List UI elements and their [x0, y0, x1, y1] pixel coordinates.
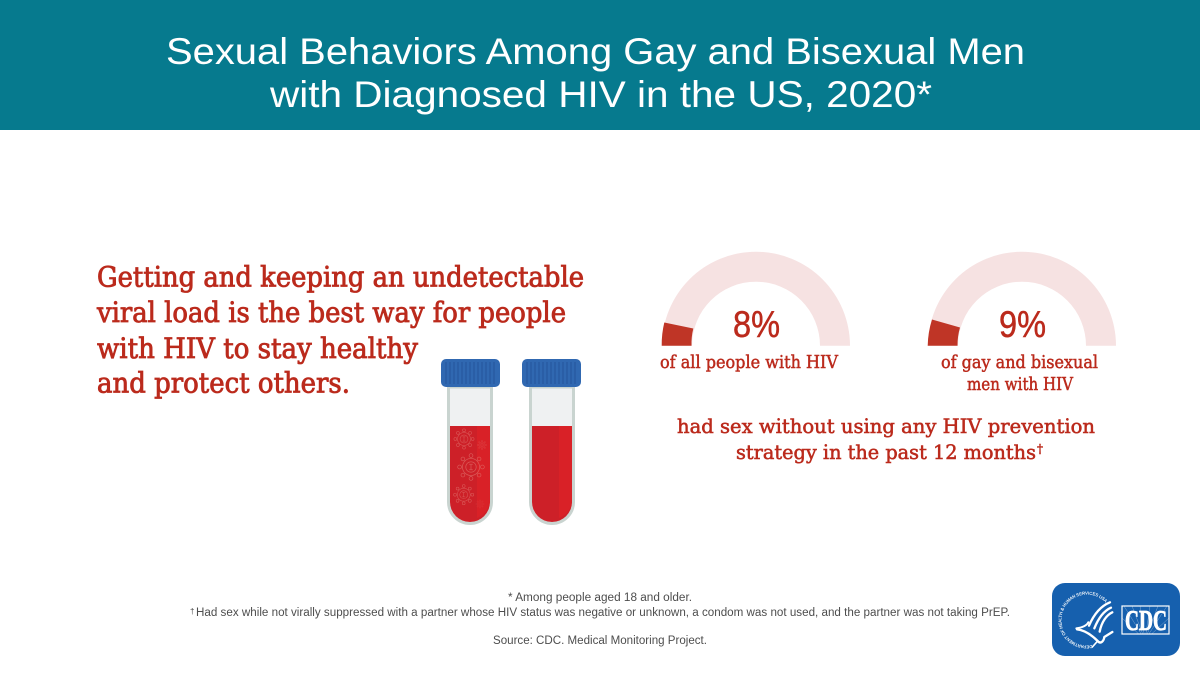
value: 9%	[999, 304, 1046, 345]
eagle	[1076, 602, 1112, 647]
headline text: and protect others.	[97, 366, 350, 400]
footnotes: †	[190, 607, 194, 616]
gauge label: men with HIV	[967, 374, 1074, 395]
statement text: †	[1037, 442, 1043, 456]
gauge: 8 percent	[662, 252, 850, 346]
footnotes: * Among people aged 18 and older.	[508, 592, 692, 604]
icon: test tube	[522, 359, 581, 524]
headline text: viral load is the best way for people	[96, 296, 566, 329]
CDC box: CDC	[1125, 605, 1167, 637]
gauge label: of gay and bisexual	[941, 352, 1098, 373]
logo: CDC and HHS	[1052, 583, 1180, 656]
seal ring text	[1061, 595, 1108, 646]
headline text: with HIV to stay healthy	[97, 332, 418, 365]
footnotes: Source: CDC. Medical Monitoring Project.	[493, 635, 707, 647]
statement text: had sex without using any HIV prevention	[677, 414, 1095, 438]
headline text: Getting and keeping an undetectable	[97, 260, 584, 294]
gauge: 9 percent	[928, 252, 1116, 346]
title: Sexual Behaviors Among Gay and Bisexual Men	[166, 31, 1025, 72]
icon: test tube with virus	[441, 359, 500, 524]
footnotes: Had sex while not virally suppressed with a partner whose HIV status was negative or unknown, a condom was not used, and the partner was not taking PrEP.	[196, 607, 1010, 619]
statement text: strategy in the past 12 months	[736, 440, 1036, 464]
gauge label: of all people with HIV	[660, 352, 839, 373]
logo: CDC and HHS: DEPARTMENT OF HEALTH & HUMAN SERVICES USA	[1058, 592, 1107, 648]
title: with Diagnosed HIV in the US, 2020*	[269, 74, 932, 115]
value: 8%	[733, 304, 780, 345]
title banner	[0, 0, 1200, 130]
